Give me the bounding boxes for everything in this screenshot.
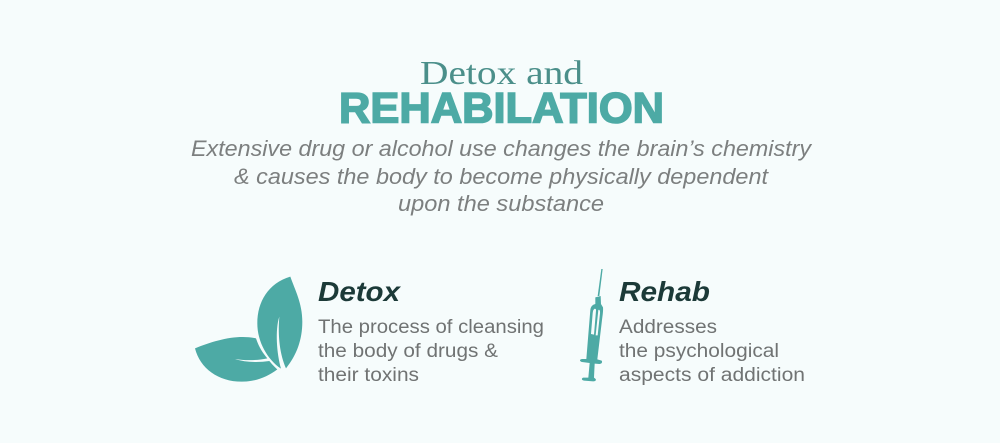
detox description: The process of cleansing xyxy=(318,317,544,338)
rehab description: the psychological xyxy=(619,341,779,362)
detox description: their toxins xyxy=(318,365,419,386)
icon: syringe xyxy=(580,269,603,381)
icon: leaves xyxy=(195,277,302,382)
intro text block: upon the substance xyxy=(398,191,604,216)
intro text block xyxy=(191,136,813,216)
intro text block: & causes the body to become physically dependent xyxy=(234,164,770,189)
detox description xyxy=(318,317,544,386)
detox block xyxy=(318,276,544,386)
rehab description xyxy=(619,317,805,386)
title: Detox and: Detox and xyxy=(420,55,583,92)
rehab description: Addresses xyxy=(619,317,717,338)
intro text block: Extensive drug or alcohol use changes the brain’s chemistry xyxy=(191,136,813,161)
detox heading: Detox xyxy=(318,276,402,307)
title: Rehabilation: REHABILATION xyxy=(339,84,664,132)
rehab block xyxy=(619,276,805,386)
detox description: the body of drugs & xyxy=(318,341,498,362)
rehab description: aspects of addiction xyxy=(619,365,805,386)
rehab heading: Rehab xyxy=(619,276,710,307)
